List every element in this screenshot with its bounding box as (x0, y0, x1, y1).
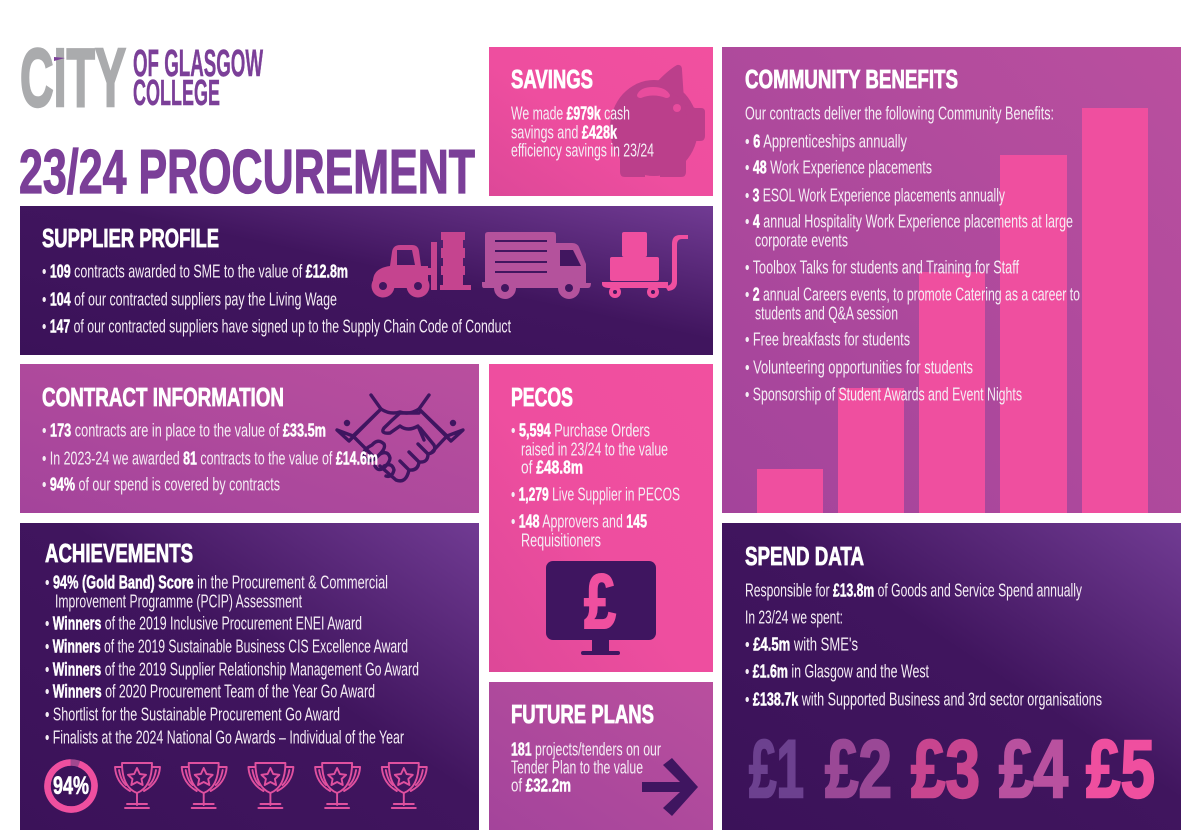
bar chart (757, 108, 1148, 513)
text: future plans: 181 projects/tenders on our (511, 740, 661, 760)
icon: forklift (372, 232, 471, 298)
text: achievements bullets: • Winners of the 2019 Sustainable Business CIS Excellence Award (45, 637, 408, 657)
panel: savings (489, 47, 713, 196)
text: community benefits list: Our contracts deliver the following Community Benefits: (745, 104, 1054, 124)
pound figures £1 to £5 (749, 724, 1155, 815)
text: community benefits list: • Sponsorship of Student Awards and Event Nights (745, 385, 1022, 405)
text: community benefits list: • 3 ESOL Work Experience placements annually (745, 186, 1005, 206)
text: contract bullets (42, 421, 378, 495)
pound figures £1 to £5: £4 (999, 724, 1068, 815)
panel: achievements (20, 523, 479, 830)
chart: 94% ring (41, 756, 101, 816)
panel: spend data (722, 523, 1181, 830)
text: spend data: In 23/24 we spent: (745, 608, 843, 628)
pound figures £1 to £5: £1 (749, 724, 804, 815)
text: future plans: Tender Plan to the value (511, 758, 643, 778)
title: 23/24 PROCUREMENT (19, 138, 475, 207)
heading: community benefits: COMMUNITY BENEFITS (745, 64, 958, 94)
text: supplier bullets: • 109 contracts awarded to SME to the value of £12.8m (42, 262, 348, 282)
text: PECOS bullets: of £48.8m (521, 458, 583, 478)
chart: 94% ring: 94% (53, 772, 89, 800)
text: spend data: Responsible for £13.8m of Goods and Service Spend annually (745, 581, 1082, 601)
icon: handshake (337, 395, 463, 481)
text: OF GLASGOW (133, 43, 263, 85)
heading: savings: SAVINGS (511, 64, 593, 94)
heading: contract information: CONTRACT INFORMATION (42, 382, 284, 412)
text: achievements bullets: • Winners of the 2019 Inclusive Procurement ENEI Award (45, 614, 362, 634)
panel: contract information (20, 364, 479, 513)
text: community benefits list: • Volunteering opportunities for students (745, 358, 973, 378)
text: achievements bullets: • Winners of 2020 Procurement Team of the Year Go Award (45, 682, 375, 702)
text: community benefits list: • 4 annual Hospitality Work Experience placements at large (745, 212, 1073, 232)
text: PECOS bullets: • 148 Approvers and 145 (511, 512, 647, 532)
panel: supplier profile (20, 206, 713, 355)
text: PECOS bullets: raised in 23/24 to the value (521, 440, 668, 460)
pound figures £1 to £5: £2 (825, 724, 892, 815)
text: contract bullets: • 173 contracts are in place to the value of £33.5m (42, 421, 326, 441)
text: savings: savings and £428k (511, 123, 618, 143)
text: savings: We made £979k cash (511, 104, 630, 124)
heading: supplier profile: SUPPLIER PROFILE (42, 223, 219, 253)
heading: PECOS: PECOS (511, 382, 573, 412)
text: community benefits list (745, 104, 1080, 405)
heading: future plans: FUTURE PLANS (511, 699, 654, 729)
text: community benefits list: • Toolbox Talks for students and Training for Staff (745, 258, 1020, 278)
panel: future plans (489, 682, 713, 830)
text: future plans: of £32.2m (511, 776, 571, 796)
icon: monitor with pound sign: £ (584, 559, 616, 645)
panel: community benefits (722, 47, 1181, 513)
text: community benefits list: students and Q&A session (755, 304, 898, 324)
icon: arrow (642, 758, 698, 816)
text: community benefits list: • Free breakfasts for students (745, 330, 910, 350)
text: contract bullets: • 94% of our spend is covered by contracts (42, 475, 280, 495)
text: supplier bullets (42, 262, 511, 337)
logo: City of Glasgow College: COLLEGE (133, 72, 220, 113)
text: achievements bullets: Improvement Programme (PCIP) Assessment (55, 592, 302, 612)
logo: City of Glasgow College: CITY (20, 31, 126, 124)
text: PECOS bullets: • 1,279 Live Supplier in PECOS (511, 485, 680, 505)
text: supplier bullets: • 147 of our contracted suppliers have signed up to the Supply Chain Code of Conduct (42, 317, 511, 337)
pound figures £1 to £5: £3 (911, 724, 980, 815)
text: savings: efficiency savings in 23/24 (511, 141, 654, 161)
icon: delivery truck (482, 232, 591, 299)
text: future plans (511, 740, 661, 796)
text: community benefits list: corporate events (755, 231, 848, 251)
text: achievements bullets: • Winners of the 2019 Supplier Relationship Management Go Award (45, 660, 419, 680)
text: contract bullets: • In 2023-24 we awarded 81 contracts to the value of £14.6m (42, 449, 378, 469)
text: PECOS bullets (511, 421, 680, 551)
text: spend data: • £4.5m with SME's (745, 635, 858, 655)
panel: PECOS (489, 364, 713, 672)
icon: piggy bank (610, 65, 705, 177)
text: achievements bullets (45, 573, 419, 748)
heading: achievements: ACHIEVEMENTS (45, 538, 193, 568)
icons: trophies (115, 763, 427, 808)
icon: monitor with pound sign (546, 559, 656, 655)
text: community benefits list: • 6 Apprenticeships annually (745, 132, 907, 152)
text: savings (511, 104, 654, 161)
text: spend data (745, 581, 1102, 710)
text: PECOS bullets: • 5,594 Purchase Orders (511, 421, 650, 441)
pound figures £1 to £5: £5 (1086, 724, 1155, 815)
text: achievements bullets: • Finalists at the 2024 National Go Awards – Individual of the Year (45, 728, 404, 748)
heading: spend data: SPEND DATA (745, 541, 864, 571)
text: supplier bullets: • 104 of our contracted suppliers pay the Living Wage (42, 290, 337, 310)
text: PECOS bullets: Requisitioners (521, 531, 601, 551)
text: achievements bullets: • 94% (Gold Band) Score in the Procurement & Commercial (45, 573, 388, 593)
text: spend data: • £1.6m in Glasgow and the West (745, 662, 929, 682)
text: community benefits list: • 48 Work Experience placements (745, 158, 932, 178)
icon: luggage trolley (602, 232, 688, 298)
text: achievements bullets: • Shortlist for the Sustainable Procurement Go Award (45, 705, 340, 725)
